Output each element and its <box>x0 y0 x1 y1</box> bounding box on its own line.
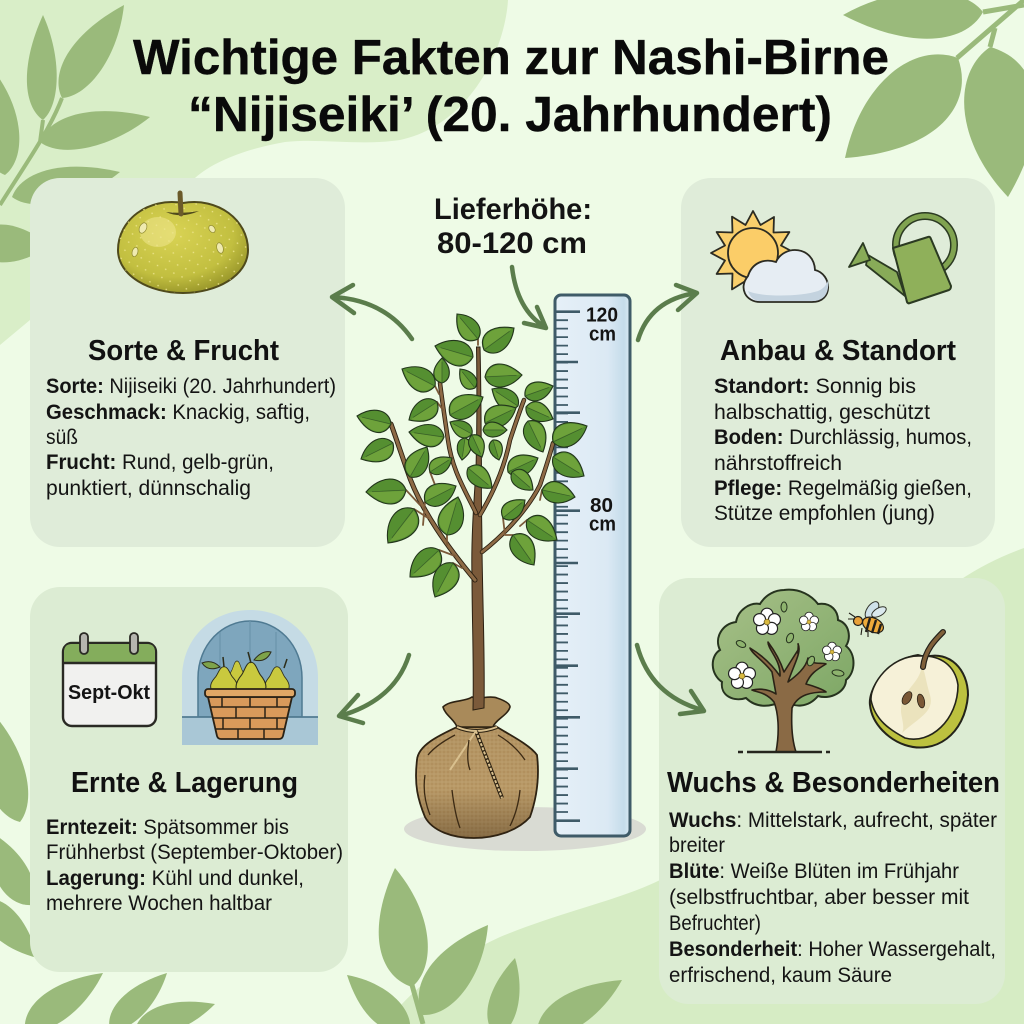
text block: Frühherbst (September-Oktober) <box>46 841 343 864</box>
text block: punktiert, dünnschalig <box>46 477 251 500</box>
text block: Stütze empfohlen (jung) <box>714 502 935 525</box>
text block: mehrere Wochen haltbar <box>46 892 272 915</box>
icon: halved pear <box>870 632 968 748</box>
text block: Besonderheit: Hoher Wassergehalt, <box>669 938 996 961</box>
text block: Erntezeit: Spätsommer bis <box>46 816 289 839</box>
burlap root ball <box>416 697 538 838</box>
text block: Boden: Durchlässig, humos, <box>714 426 972 449</box>
delivery height label: 80-120 cm <box>437 227 587 260</box>
tree leaves <box>354 308 592 603</box>
text block: erfrischend, kaum Säure <box>669 964 892 987</box>
icon: flowering tree <box>713 590 854 752</box>
heading: Sorte & Frucht <box>88 335 279 367</box>
icon: bee <box>848 599 888 637</box>
arrow: to Wuchs und Besonderheiten <box>637 645 704 714</box>
icon: pear basket in cellar <box>182 610 318 745</box>
ruler label: 80 cm <box>589 495 616 536</box>
young nashi tree <box>354 308 592 710</box>
title <box>133 31 889 142</box>
background shape: lower right <box>385 548 1024 1024</box>
ruler label: 120 cm: cm <box>589 324 616 346</box>
icon: watering can <box>849 216 954 303</box>
delivery height label <box>434 193 592 260</box>
text block: Befruchter) <box>669 912 761 935</box>
arrow: height label to ruler <box>512 267 546 328</box>
text block: Pflege: Regelmäßig gießen, <box>714 477 972 500</box>
ruler label: 120 cm: 120 <box>586 304 618 326</box>
panel: Sorte und Frucht <box>30 178 345 547</box>
text block <box>714 375 972 525</box>
title: Wichtige Fakten zur Nashi-Birne <box>133 31 889 85</box>
ground shadow <box>404 807 646 851</box>
ruler label: 120 cm <box>586 304 618 346</box>
title: “Nijiseiki’ (20. Jahrhundert) <box>188 88 832 142</box>
panel: Anbau und Standort <box>681 178 995 547</box>
text block: Geschmack: Knackig, saftig, <box>46 401 310 424</box>
ruler label: 80 cm: 80 <box>590 495 613 517</box>
arrow: to Anbau und Standort <box>638 285 697 340</box>
text block: Sorte: Nijiseiki (20. Jahrhundert) <box>46 375 336 398</box>
measuring ruler <box>555 295 630 836</box>
text block: breiter <box>669 834 725 857</box>
background shape: top left <box>0 0 508 345</box>
icon: nashi pear <box>118 193 248 293</box>
arrow: to Ernte und Lagerung <box>339 655 409 723</box>
text block: Standort: Sonnig bis <box>714 375 916 398</box>
text block: nährstoffreich <box>714 452 842 475</box>
tree trunk and branches <box>472 347 484 710</box>
decorative leaves: bottom centre <box>336 865 631 1024</box>
text block <box>46 375 336 500</box>
panel: Wuchs und Besonderheiten <box>659 578 1005 1004</box>
panel: Ernte und Lagerung <box>30 587 348 972</box>
text block: Blüte: Weiße Blüten im Frühjahr <box>669 860 959 883</box>
heading: Wuchs & Besonderheiten <box>667 767 1000 799</box>
text block: halbschattig, geschützt <box>714 401 930 424</box>
icon: calendar: Sept-Okt <box>68 682 150 704</box>
decorative leaves: bottom left <box>0 705 219 1024</box>
arrow: to Sorte und Frucht <box>332 285 412 339</box>
heading: Ernte & Lagerung <box>71 767 298 799</box>
text block: Frucht: Rund, gelb-grün, <box>46 451 274 474</box>
text block: Lagerung: Kühl und dunkel, <box>46 867 304 890</box>
ruler label: 80 cm: cm <box>589 514 616 536</box>
icon: sun and cloud <box>711 211 828 302</box>
text block: süß <box>46 426 78 449</box>
delivery height label: Lieferhöhe: <box>434 193 592 226</box>
text block: (selbstfruchtbar, aber besser mit <box>669 886 969 909</box>
text block <box>46 816 343 915</box>
decorative leaves: top right <box>823 0 1024 201</box>
text block: Wuchs: Mittelstark, aufrecht, später <box>669 809 997 832</box>
icon: calendar <box>63 633 156 726</box>
heading: Anbau & Standort <box>720 335 956 367</box>
decorative leaves: top left <box>0 0 153 262</box>
text block <box>669 809 997 987</box>
